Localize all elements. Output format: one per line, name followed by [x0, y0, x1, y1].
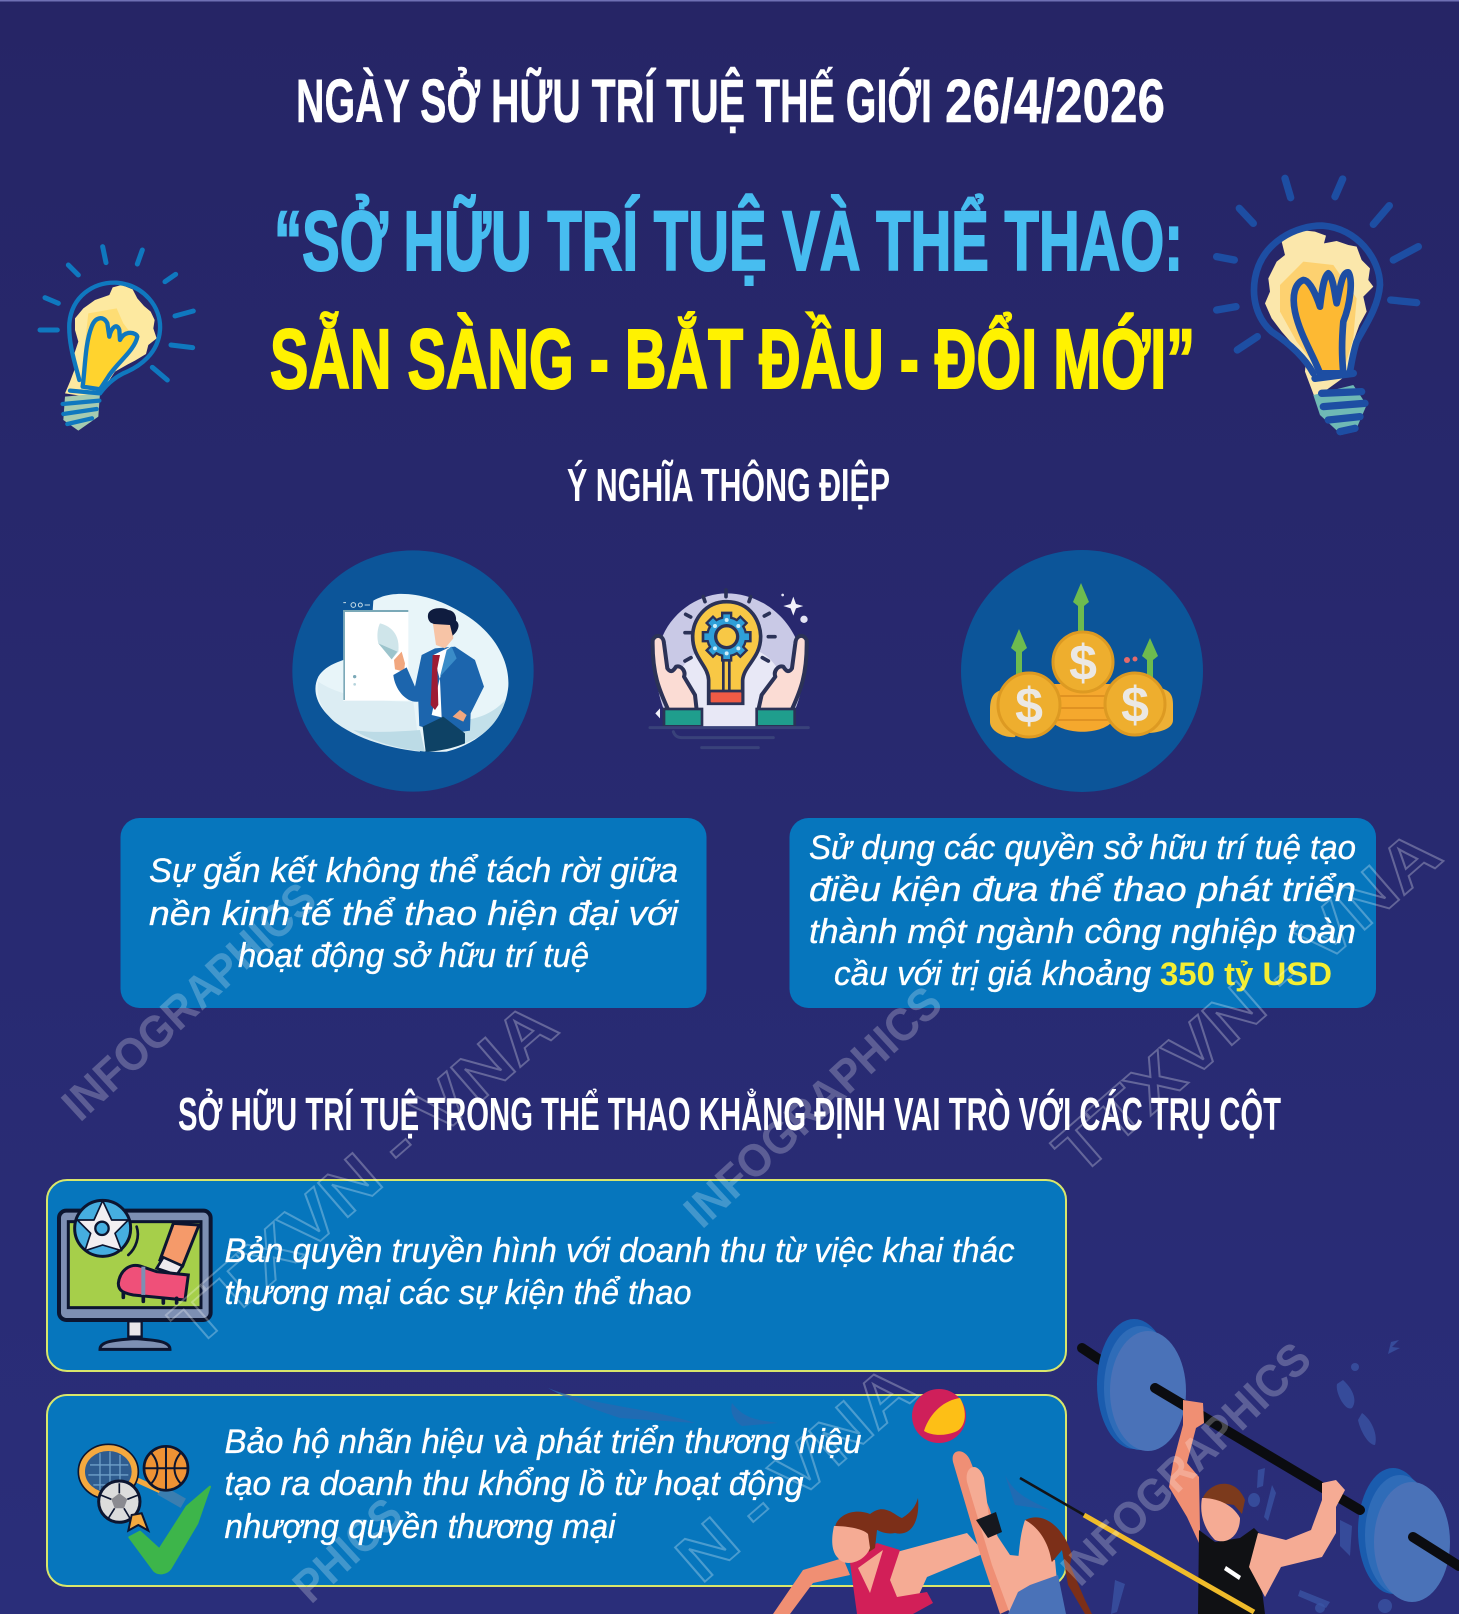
icon: football on TV — [59, 1200, 211, 1349]
athlete: javelin thrower — [953, 1451, 1092, 1614]
watermarks: PHICS — [283, 1487, 412, 1612]
text: broadcast rights — [224, 1232, 1014, 1312]
panel: meaning two: 350 tỷ USD — [1160, 956, 1332, 992]
icon: sports gear with check mark — [78, 1444, 210, 1573]
panel: meaning one: nền kinh tế thể thao hiện đại với — [149, 895, 680, 933]
icon: left light bulb — [40, 247, 193, 431]
text: trademark protection — [224, 1423, 862, 1546]
panel: trademark protection — [47, 1395, 1066, 1586]
panel: meaning two: cầu với trị giá khoảng — [834, 955, 1151, 993]
icon: hands holding idea bulb — [650, 590, 808, 748]
panel: meaning one: Sự gắn kết không thể tách rời giữa — [149, 852, 678, 890]
watermarks: INFOGRAPHICS — [1051, 1332, 1321, 1595]
illustration: athletes — [548, 1319, 1459, 1614]
watermarks: TTXVN - VNA — [156, 987, 570, 1361]
text: trademark protection: tạo ra doanh thu khổng lồ từ hoạt động — [224, 1465, 804, 1503]
text: broadcast rights: Bản quyền truyền hình với doanh thu từ việc khai thác — [224, 1232, 1014, 1270]
icon: presenter in circle — [292, 550, 534, 792]
title: event date: NGÀY SỞ HỮU TRÍ TUỆ THẾ GIỚI — [296, 67, 932, 135]
icon: right light bulb — [1217, 178, 1418, 435]
panel: meaning two: điều kiện đưa thể thao phát triển — [809, 871, 1356, 909]
icon: gold coins with arrows in circle: $ — [1069, 635, 1097, 691]
icon: gold coins with arrows in circle — [961, 550, 1203, 792]
volleyball — [912, 1389, 966, 1443]
athlete: weightlifter with barbell — [1082, 1319, 1459, 1614]
text: broadcast rights: thương mại các sự kiện thể thao — [224, 1274, 692, 1312]
text: trademark protection: nhượng quyền thương mại — [224, 1508, 617, 1546]
panel: meaning two: Sử dụng các quyền sở hữu trí tuệ tạo — [809, 829, 1356, 867]
panel: meaning one — [120, 818, 706, 1008]
icon: gold coins with arrows in circle: $ — [1121, 677, 1149, 733]
javelin — [1020, 1478, 1254, 1612]
panel: broadcast rights — [47, 1180, 1066, 1371]
athlete: volleyball player — [773, 1498, 985, 1614]
icon: gold coins with arrows in circle: $ — [1015, 678, 1043, 734]
panel: meaning one: hoạt động sở hữu trí tuệ — [238, 937, 589, 975]
heading: meaning of the message: Ý NGHĨA THÔNG ĐIỆP — [567, 459, 890, 511]
watermarks — [52, 815, 1454, 1612]
panel: meaning two — [790, 818, 1376, 1008]
watermarks: TTXVN - VNA — [1040, 815, 1454, 1189]
watermarks: INFOGRAPHICS — [52, 872, 326, 1130]
watermarks: INFOGRAPHICS — [674, 976, 952, 1237]
title: event date: 26/4/2026 — [945, 67, 1165, 135]
panel: meaning two: thành một ngành công nghiệp toàn — [809, 913, 1356, 951]
text: trademark protection: Bảo hộ nhãn hiệu và phát triển thương hiệu — [224, 1423, 862, 1461]
watermarks: N - VNA — [662, 1349, 929, 1596]
